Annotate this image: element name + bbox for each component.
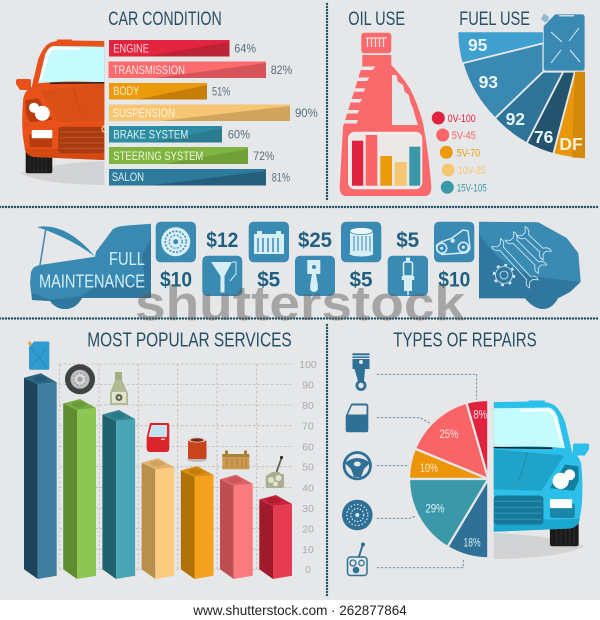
legend: oil grades: 10V-85 [458, 165, 486, 177]
chart: repairs pie: 10% [420, 463, 438, 475]
heading: most popular services: MOST POPULAR SERVICES [87, 329, 292, 352]
price: $10: $10 [160, 268, 192, 292]
bar: salon: SALON [112, 172, 144, 184]
panel: full maintenance [30, 222, 581, 309]
price: $25: $25 [298, 229, 332, 252]
bar: salon: 81% [272, 170, 290, 184]
legend: oil grades: 0V-100 [448, 113, 476, 125]
axis labels: 90 [302, 379, 314, 391]
chart: repairs pie: 8% [473, 410, 487, 422]
bar: engine: 64% [234, 42, 256, 56]
price: $12: $12 [206, 229, 238, 252]
watermark: shutterstock [135, 277, 466, 331]
icon: jerry can [541, 14, 585, 71]
panel: car condition [16, 8, 318, 186]
chart: repairs pie: 18% [464, 538, 480, 550]
bar: 3d pink [220, 475, 253, 579]
icon tile: funnel [202, 256, 242, 296]
axis labels: 20 [302, 524, 314, 536]
icon: car door [346, 404, 368, 432]
icon: red car door [147, 423, 169, 452]
bar: brake system: 60% [228, 128, 250, 142]
bar: 3d blue [24, 373, 57, 579]
icon: gearbox [348, 542, 367, 576]
bar: 3d cream [142, 458, 174, 579]
axis labels: 0 [305, 564, 311, 576]
bar: transmission: 82% [271, 63, 293, 77]
bar: engine: ENGINE [113, 43, 149, 55]
axis labels: 30 [302, 503, 314, 515]
panel: oil use [335, 8, 487, 196]
chart: fuel fan: DF [559, 134, 583, 154]
panel: most popular services [24, 329, 317, 579]
price: $5: $5 [257, 268, 281, 292]
icon tile: piston [295, 256, 335, 296]
bar: steering system [109, 147, 275, 164]
axis labels: 80 [302, 400, 314, 412]
bar: salon [109, 169, 290, 186]
axis labels [299, 359, 317, 576]
panel: types of repairs [342, 329, 589, 576]
icon: oil bottle with bar chart [335, 33, 431, 196]
icon tile: drive belt [434, 222, 474, 262]
axis labels: 50 [302, 462, 314, 474]
chart: fuel fan: 76 [534, 127, 554, 147]
bar: steering system: 72% [253, 149, 275, 163]
icon tile: battery [249, 222, 289, 262]
icon tile: spark plug [388, 256, 428, 296]
chart: fuel fan: 93 [479, 72, 498, 92]
icon: blue jerry can [28, 341, 49, 370]
bar: 3d teal [102, 410, 135, 579]
heading: fuel use: FUEL USE [459, 8, 530, 30]
icon: truck with open hood: FULL [109, 249, 145, 269]
icon: wheel rim [342, 500, 373, 530]
chart: repairs pie: 29% [426, 504, 444, 516]
price: $5: $5 [396, 229, 420, 252]
icon: truck with open hood [30, 224, 151, 309]
icon: battery [222, 450, 249, 469]
heading: types of repairs: TYPES OF REPAIRS [393, 329, 537, 352]
icon: tire [65, 364, 95, 394]
chart: repairs pie: 25% [440, 429, 458, 441]
axis labels: 60 [302, 441, 314, 453]
bar: transmission: TRANSMISSION [113, 65, 185, 77]
legend: oil grades: 5V-45 [452, 130, 476, 142]
bar: steering system: STEERING SYSTEM [113, 151, 203, 163]
bar: engine [109, 40, 256, 56]
price: $5: $5 [350, 268, 373, 292]
chart: fuel fan: 92 [506, 109, 525, 129]
legend: oil grades [432, 112, 487, 194]
icon: paint can [187, 436, 207, 462]
icon: truck with open hood: MAINTENANCE [39, 271, 145, 291]
icon: steering wheel [344, 452, 370, 479]
footer: stock credit: www.shutterstock.com · 262877864 [192, 602, 407, 618]
bar: suspension: 90% [295, 106, 318, 120]
chart: fuel fan [458, 32, 585, 158]
price: $10: $10 [438, 268, 470, 292]
axis labels: 10 [302, 544, 314, 556]
bar: body [109, 83, 231, 100]
heading: oil use: OIL USE [348, 8, 405, 30]
panel: fuel use [458, 8, 585, 158]
icon: orange half car [16, 40, 105, 185]
chart: fuel fan: 95 [468, 35, 488, 55]
axis labels: 100 [299, 359, 317, 371]
icon: blue half car [494, 400, 589, 559]
icon: truck rear with tools [479, 222, 581, 309]
icon: oil bottle olive [110, 372, 128, 405]
bar: 3d green [63, 399, 96, 579]
bar: brake system: BRAKE SYSTEM [113, 130, 188, 142]
bar: suspension [109, 104, 318, 121]
bar: suspension: SUSPENSION [113, 108, 175, 120]
bar: brake system [109, 126, 250, 142]
axis labels: 70 [302, 420, 314, 432]
bar: 3d orange [181, 466, 214, 579]
bar: body: BODY [113, 86, 140, 98]
legend: oil grades: 5V-70 [457, 147, 480, 159]
icon tile: oil filter [341, 222, 381, 262]
bar: 3d red [259, 495, 292, 579]
icon tile: wheel rim [156, 222, 196, 262]
bar: body: 51% [212, 84, 231, 98]
legend: oil grades: 15V-105 [457, 182, 487, 194]
heading: car condition: CAR CONDITION [108, 8, 222, 30]
icon: piston [352, 353, 370, 391]
chart: repairs pie [409, 400, 488, 558]
axis labels: 40 [302, 482, 314, 494]
bar: transmission [108, 62, 293, 78]
icon: gearbox [266, 456, 284, 488]
